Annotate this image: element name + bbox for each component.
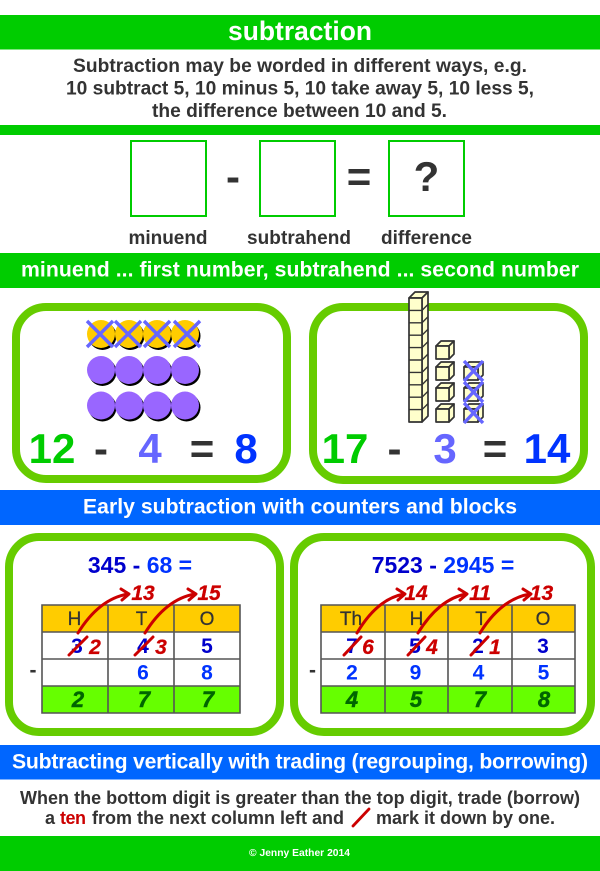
red slash mark [353,809,369,826]
panel: blocks [313,292,584,480]
box labels: subtrahend [247,228,351,249]
explanation text: mark it down by one. [376,808,555,828]
minus sign: - [226,153,240,200]
red trading marks: 4 [425,636,438,659]
place value table: O [200,609,214,630]
place value table: 7 [474,687,488,712]
equation: 17 - 3 = 14: - [388,425,402,472]
place value table: O [536,609,550,630]
number sentence with empty boxes [131,141,464,216]
place value table: 2 [472,635,484,658]
red trading marks [344,582,553,659]
intro text [66,56,534,122]
equation: 17 - 3 = 14: = [483,425,507,472]
red trading marks: 15 [197,582,221,605]
problem heading: 345 - 68 = [88,552,192,578]
heading: minuend and subtrahend [0,253,600,288]
red trading marks: 11 [469,582,491,605]
place value table: 2 [71,687,85,712]
place value table: 3 [71,635,83,658]
explanation text: When the bottom digit is greater than the top digit, trade (borrow) [20,788,580,808]
crossed out cubes [464,361,483,423]
explanation text: a [45,808,56,828]
place value table [30,605,240,713]
equation: 17 - 3 = 14 [322,425,571,472]
title banner: subtraction [228,16,372,46]
place value table: 7 [346,635,358,658]
problem heading: 7523 - 2945 = [372,552,514,578]
divider band [0,125,600,135]
heading: counters and blocks [0,490,600,525]
equals sign: = [347,153,371,200]
place value table: - [30,659,36,682]
panel: 345 - 68 [9,537,280,732]
red trading marks: 13 [131,582,155,605]
loose cubes [436,341,454,422]
panel: 7523 - 2945 [294,537,591,732]
place value table: H [68,609,81,630]
place value table: 7 [202,687,216,712]
box labels [128,228,472,249]
place value table: Th [340,609,362,630]
box labels: minuend [128,228,208,249]
counters row two [87,356,200,386]
place value table: 4 [473,662,485,684]
heading: vertical subtraction: Subtracting vertically with trading (regrouping, borrowing) [12,750,588,774]
red trading marks: 14 [404,582,428,605]
counters crossed out [87,320,200,350]
intro text: Subtraction may be worded in different ways, e.g. [73,56,527,77]
place value table: T [475,609,487,630]
place value table: T [136,609,148,630]
place value table: 5 [538,662,550,684]
equation: 12 - 4 = 8: 12 [29,425,75,472]
place value table: 4 [345,687,358,712]
place value table [309,605,575,713]
heading: counters and blocks: Early subtraction with counters and blocks [83,496,517,518]
box labels: difference [381,228,472,249]
red trading marks: 2 [88,636,101,659]
equation: 12 - 4 = 8: - [94,425,108,472]
ten stick [409,292,428,422]
counters row three [87,392,200,422]
place value table: 4 [137,635,149,658]
place value table: - [309,659,316,682]
red trading marks: 13 [530,582,553,605]
explanation text [20,788,580,828]
question mark: ? [414,153,439,200]
red trading marks: 6 [362,636,374,659]
intro text: 10 subtract 5, 10 minus 5, 10 take away 5, 10 less 5, [66,78,534,100]
place value table: H [410,609,423,630]
explanation text: from the next column left and [92,808,344,828]
equation: 12 - 4 = 8 [29,425,258,472]
equation: 12 - 4 = 8: 4 [138,425,162,472]
box: minuend [131,141,206,216]
box: subtrahend [260,141,335,216]
footer [0,836,600,871]
place value table: 8 [538,687,551,712]
equation: 17 - 3 = 14: 3 [433,425,457,472]
place value table: 5 [409,635,421,658]
place value table: 2 [346,662,358,684]
place value table: 8 [201,662,213,684]
red trading marks [69,582,221,659]
place value table: 6 [137,662,149,684]
heading: vertical subtraction [0,745,600,780]
box: difference [389,141,464,216]
intro text: the difference between 10 and 5. [152,101,447,122]
place value table: 3 [537,635,549,658]
footer: © Jenny Eather 2014 [249,848,350,859]
place value table: 9 [410,662,421,684]
heading: minuend and subtrahend: minuend ... first number, subtrahend ... second number [21,258,579,282]
place value table: 5 [410,687,423,712]
place value table: 7 [138,687,152,712]
panel: counters [16,307,287,479]
equation: 12 - 4 = 8: = [190,425,214,472]
red trading marks: 1 [489,636,501,659]
place value table: 5 [201,635,213,658]
title banner [0,15,600,50]
equation: 17 - 3 = 14: 17 [322,425,368,472]
equation: 17 - 3 = 14: 14 [524,425,571,472]
equation: 12 - 4 = 8: 8 [234,425,258,472]
explanation text: ten [60,808,86,828]
red trading marks: 3 [155,636,167,659]
